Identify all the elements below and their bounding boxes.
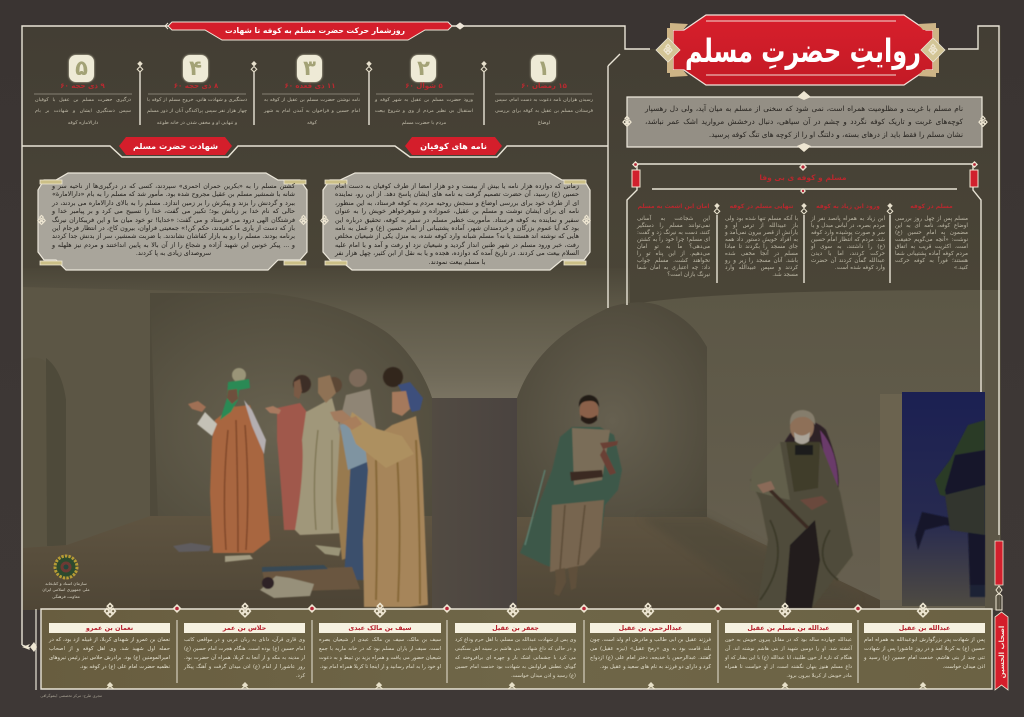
- description 5: درگیری حضرت مسلم بن عقیل با کوفیان سپس دستگیری ایشان و شهادت بر بام دارالاماره کوفه: [35, 97, 131, 126]
- name: [725, 623, 852, 633]
- column: step 2: [374, 54, 473, 126]
- tab: martyrdom: [119, 137, 232, 155]
- figure: elder in blue turban: [330, 382, 428, 607]
- text: letters of Kufa: زمانی که دوازده هزار نامه یا بیش از بیست و دو هزار امضا از طرف کوفیان به دست امام حسین (ع) رسید، آن حضرت تصمیم گرفت به نامه های ایشان پاسخ دهد. از این رو، نماینده ای از طرف خود برای بررسی اوضاع و سنجش روحیه مردم به کوفه فرستاد، به این منظور، نامه ای برای ایشان نوشت و مسلم بن عقیل، عموزاده و شوهرخواهر خویش را به عنوان سفیر و نماینده به کوفه فرستاد. مأموریت خطیر مسلم در سفر به کوفه، تحقیق درباره این بود که آیا عموم بزرگان و خردمندان شهر، آماده پشتیبانی از امام حسین (ع) و عمل به نامه هایی که نوشته اند هستند یا نه؟ مسلم شبانه وارد کوفه شده، به منزل یکی از شیعیان مخلص رفت، خبر ورود مسلم در شهر طنین انداز گردید و شیعیان نزد او رفت و آمد و با امام علیه السلام بیعت می کردند. در تاریخ آمده که دوازده، هجده و یا به نقل از ابن کثیر، چهل هزار نفر با مسلم بیعت نمودند.: [335, 183, 579, 266]
- card: Abdul-Rahman ibn Aqil: [590, 623, 712, 670]
- name: [590, 623, 711, 633]
- credit line: مجری طرح: مرکز تخصصی اینفوگرافی: [40, 693, 102, 698]
- panel: letters text box: [321, 173, 590, 270]
- biography: عبدالله چهارده ساله بود که در مقاتل پیرون خویش به خون آغشته شد. او را دومین شهید از بنی هاشم نوشته اند. آن هنگام که تازه از خون طلبید، ابا عبدالله (ع) با این بشار که او داغ مسلم هنوز پنهان نگشته است، از او خواست تا همراه مادر خویش از کربلا بیرون برود.: [725, 637, 852, 679]
- figure: worshipper in cream robe: [295, 375, 345, 556]
- card: Hallas ibn Amr: [184, 623, 306, 679]
- name: حلاس بن عمر: [223, 624, 266, 632]
- heading: martyrdom: شهادت حضرت مسلم: [133, 141, 218, 151]
- number badge 4: ۴: [189, 56, 202, 80]
- column: step 4: [147, 54, 247, 126]
- date 2: ۵ شوال ۶۰: [405, 82, 443, 90]
- name: عبدالله بن عقیل: [899, 624, 950, 632]
- date 1: ۱۵ رمضان ۶۰: [521, 82, 567, 90]
- ribbon: companions of Hussain: اصحاب الحسین: [998, 626, 1006, 678]
- date 3: ۱۱ ذی قعده ۶۰: [284, 82, 336, 90]
- panel: main background: [22, 26, 1001, 610]
- number badge 3: ۳: [303, 56, 316, 80]
- name: نعمان بن عمرو: [86, 624, 133, 632]
- biography: نعمان بن عمرو از شهدای کربلا، از قبیله ازد بود، که در حمله اول شهید شد. وی اهل کوفه و از اصحاب امیرالمومنین (ع) بود. برادرش حلاس نیز رئیس نیروهای نظمیه حضرت امام علی (ع) در کوفه بود.: [49, 637, 170, 670]
- name: عبدالرحمن بن عقیل: [619, 624, 682, 632]
- heading: Muslim and unfaithful Kufa: مسلم و کوفه ی بی وفا: [759, 173, 847, 182]
- panel: title banner: [656, 15, 945, 85]
- figures: rear worshippers: [336, 367, 403, 580]
- heading: امان ابن اشعث به مسلم: [638, 203, 709, 210]
- figures: praying group: [173, 367, 428, 607]
- heading: ورود ابن زیاد به کوفه: [816, 203, 880, 210]
- description 2: ورود حضرت مسلم بن عقیل به شهر کوفه و استقبال بی نظیر مردم از وی و شروع بیعت مردم با حضرت مسلم: [375, 97, 473, 126]
- logo: library emblem: [55, 556, 77, 578]
- number badge 5: [69, 55, 94, 82]
- name: عبدالله بن مسلم بن عقیل: [747, 624, 830, 632]
- number badge 2: [411, 55, 436, 82]
- number badge 4: [183, 55, 208, 82]
- description 4: دستگیری و شهادت هانی، خروج مسلم از کوفه با چهار هزار نفر سپس پراکندگی آنان از دور مسلم و تنهایی او و مخفی شدن در خانه طوعه: [147, 97, 247, 126]
- date 4: ۸ ذی حجه ۶۰: [174, 82, 218, 90]
- panel: martyrdom text box: [38, 173, 307, 270]
- ribbon: companions of Hussain: [995, 612, 1008, 690]
- logo caption: سازمان اسناد و کتابخانه ملی جمهوری اسلامی ایران معاونت فرهنگی: [42, 581, 90, 599]
- number badge 2: ۲: [417, 56, 430, 80]
- biography: پس از شهادت پدر بزرگوارش ابوعبدالله به همراه امام حسین (ع) به کربلا آمد و در روز عاشورا پس از شهادت تنی چند از بنی هاشم، خدمت امام حسین (ع) رسید و اذن میدان خواست.: [864, 637, 985, 670]
- name: [455, 623, 576, 633]
- body: مسلم پس از چهل روز بررسی اوضاع کوفه، نامه ای به این مضمون به امام حسین (ع) نوشت: «آنچه می‌گویم حقیقت است. اکثریت قریب به اتفاق مردم کوفه آماده پشتیبانی شما هستند؛ فوراً به کوفه حرکت کنید.»: [895, 216, 968, 271]
- body: با آنکه مسلم تنها شده بود ولی باز عبیدالله از ترس او و یارانش از قصر بیرون نمی‌آمد و به افراد خویش دستور داد همه جای مسجد را بگردند تا مبادا مسلم در آنجا مخفی شده باشد. آنان مسجد را زیر و رو کردند و سپس عبیدالله وارد مسجد شد.: [725, 216, 798, 278]
- card: Numan ibn Amr: [48, 623, 170, 670]
- figure: shadowy runner in doorway: [915, 420, 985, 597]
- date 5: ۹ ذی حجه ۶۰: [60, 82, 105, 90]
- figure: running man in green cloak: [520, 395, 622, 596]
- name: [184, 623, 305, 633]
- name: [319, 623, 441, 633]
- column: step 3: [264, 54, 360, 126]
- biography: وی پس از شهادت عبدالله بن مسلم، با اهل حرم وداع کرد و در حالی که داغ شهادت بنی هاشم بر سینه اش سنگینی می کرد با چشمانی اشک بار و چهره ای برافروخته که گویای عطش فراوانش به شهادت بود خدمت امام حسین (ع) رسید و اذن میدان خواست.: [455, 637, 576, 679]
- banner: timeline heading: [165, 22, 464, 40]
- biography: وی قاری قرآن، دانای به زبان عربی و در مواقعی کاتب امام حسین (ع) بوده است. هنگام هجرت امام حسین (ع) از مدینه به مکه و از آنجا به کربلا، همراه آن حضرت بود. روز عاشورا از امام (ع) اذن میدان گرفت و آهنگ پیکار کرد.: [184, 637, 305, 679]
- number badge 3: [297, 55, 322, 82]
- column: Muslim alone: [724, 203, 798, 278]
- card: Sayf ibn Malik: [319, 623, 441, 670]
- text: intro: نام مسلم با غربت و مظلومیت همراه است، نمی شود که سخنی از مسلم به میان آید، ولی دل رهسپار کوچه‌های غربت و تاریک کوفه نگردد و چشم در آن سیاهی، دنبال درخشش مروارید اشک عمر نباشد، نشان مسلم را فقط باید از درهای بسته، و دلتنگ او را از کوچه های تنگ کوفه پرسید.: [645, 104, 963, 139]
- description 3: نامه نوشتن حضرت مسلم بن عقیل از کوفه به امام حسین و فراخوان به آمدن امام به شهر کوفه: [264, 97, 360, 126]
- column: deception: [636, 203, 710, 278]
- body: این شجاعت به آسانی نمی‌توانند مسلم را دستگیر کنند، دست به نیرنگ زد و گفت: ای مسلم! چرا خود را به کشتن می‌دهی؟ ما به تو امان می‌دهیم. از این پناه تو را نخواهند کشت. مسلم جواب داد: چه اعتباری به امان شما نیرنگ بازان است؟: [637, 216, 710, 278]
- card: Abdullah ibn Aqil: [864, 623, 985, 670]
- number badge 5: ۵: [75, 56, 88, 80]
- name: سیف بن مالک عبدی: [348, 624, 412, 632]
- panel: intro text box: [623, 91, 987, 152]
- name: [864, 623, 985, 633]
- rugs and belongings on the floor: [173, 543, 360, 598]
- name: جعفر بن عقیل: [492, 624, 539, 632]
- number badge 1: ۱: [537, 56, 550, 80]
- text: martyrdom: کشتن مسلم را به «بکرین حمران احمری» سپردند، کسی که در درگیری‌ها از ناحیه سر و شانه با شمشیر مسلم بن عقیل مجروح شده بود. مأمور شد که مسلم را به بام «دارالامارة» ببرد و گردنش را بزند و پیکرش را بر زمین اندازد. مسلم را به بالای دارالاماره می بردند، در حالی که نام خدا بر زبانش بود؛ تکبیر می گفت، خدا را تسبیح می کرد و بر پیامبر خدا و فرشتگان الهی درود می فرستاد و می گفت: «خدایا! تو خود میان ما و این فریبکاران نیرنگ باز که دست از یاری ما کشیدند، حکم کن!» جمعیتی فراوان، بیرون کاخ، در انتظار فرجام این برنامه بودند. مسلم را رو به بازار کفاشان نشاندند. با ضربت شمشیر، سر از بدنش جدا کردند و ... پیکر خونین این شهید آزاده و شجاع را از آن بالا به پایین انداختند و مردم نیز هلهله و سروصدای زیادی به پا کردند.: [52, 183, 295, 257]
- name: [49, 623, 170, 633]
- ornaments: right-panel lozenges: [137, 61, 1003, 610]
- tab: letters: [405, 137, 502, 155]
- biography: فرزند عقیل بن ابی طالب و مادرش ام ولد است. چون بلند قامت بود به وی «رمح عقیل» (نیزه عقیل) می گفتند. عبدالرحمن با خدیجه، دختر امام علی (ع) ازدواج کرد و دارای دو فرزند به نام های سعید و عقیل بود.: [590, 637, 711, 670]
- heading: timeline: روزشمار حرکت حضرت مسلم به کوفه تا شهادت: [225, 26, 405, 35]
- number badge 1: [531, 55, 556, 82]
- card: Jafar ibn Aqil: [455, 623, 576, 679]
- column: Ibn Ziyad arrives: [810, 203, 885, 271]
- biography: سیف بن مالک، سیف بن مالک عبدی از شیعیان بصره است. سیف از یاران مسلم بود که در خانه ماریه با جمع شیعیان حضور می یافت و همراه یزید بن ثبیط و به دعوت او خود را به امام رسانید و از اینجا تا کربلا همراه امام بود.: [319, 637, 441, 670]
- column: step 1: [495, 54, 593, 126]
- title text: روایتِ حضرتِ مسلم: [685, 32, 921, 70]
- body: ابن زیاد به همراه پانصد نفر از مردم بصره، در لباس مبدل و با سر و صورت پوشیده وارد کوفه شد. مردم که انتظار امام حسین (ع) را داشتند، به سوی او حرکت کردند، اما با دیدن عبدالله گمان کردند آن حضرت وارد کوفه شده است.: [811, 216, 885, 271]
- illustration: mosque interior scene: [22, 268, 1000, 610]
- figure: worshipper in red robe: [265, 375, 313, 530]
- column: Muslim in Kufa: [895, 203, 968, 271]
- heading: مسلم در کوفه: [910, 203, 953, 210]
- heading: تنهایی مسلم در کوفه: [730, 203, 793, 210]
- figure: worshipper in green turban leading prayer: [188, 368, 270, 562]
- heading: letters of Kufa: نامه های کوفیان: [420, 141, 487, 151]
- figure: man with sword and dark apron: [750, 410, 853, 608]
- panel: companions strip: [22, 604, 992, 690]
- card: Abdullah ibn Muslim: [724, 623, 852, 679]
- description 1: رسیدن هزاران نامه دعوت به دست امام، سپس فرستادن مسلم بن عقیل به کوفه برای بررسی اوضاع: [495, 97, 593, 126]
- column: step 5: [35, 54, 131, 126]
